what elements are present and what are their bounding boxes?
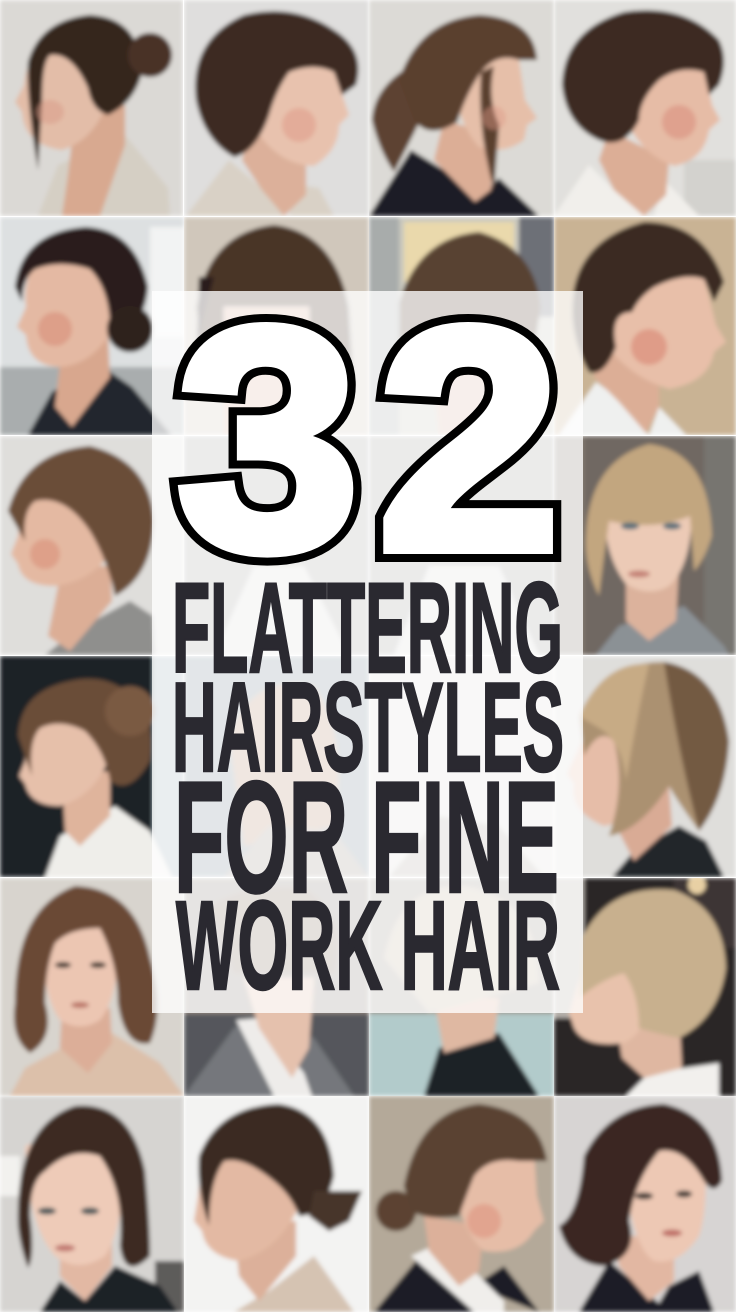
photo: behind panel, centre right — [390, 814, 544, 877]
photo: side bun in black blazer — [369, 1096, 554, 1312]
photo: messy bun in white shirt on dark background — [0, 656, 184, 877]
photo: behind panel, centre left — [184, 656, 369, 877]
photo: wavy chin-length bob in black top — [554, 1096, 736, 1312]
photo: blonde bob in black blazer — [369, 878, 554, 1096]
photo: low bun in dark blazer — [0, 217, 184, 435]
photo: side-swept bob with bangs — [184, 0, 369, 216]
photo: pale portrait behind panel — [369, 436, 554, 655]
photo: chestnut bob with bangs and white shirt — [554, 217, 736, 435]
photo: wispy updo in grey blazer — [0, 436, 158, 655]
photo: short layered crop with white shirt — [554, 0, 736, 216]
number: 32 — [176, 262, 561, 617]
photo: ash-brown layered bob in black top — [565, 656, 736, 877]
title text — [172, 557, 564, 1016]
number: 32: 2 — [377, 262, 561, 617]
photo: pale portrait behind panel — [184, 436, 369, 655]
number: 32: 3 — [176, 262, 360, 617]
photo: side bun with blazer — [0, 0, 183, 216]
photo: soft curls in blush blazer — [0, 878, 184, 1096]
photo: blonde fringe portrait in grey blazer — [554, 436, 736, 655]
photo: blonde tousled bob on dark background — [554, 878, 736, 1096]
photo: low ponytail with black blazer — [369, 0, 554, 216]
photo: centre-left brown bob, mostly behind panel — [184, 217, 369, 435]
photo: low tousled ponytail in beige blazer — [184, 1096, 368, 1312]
photo: tousled brunette portrait in black top — [0, 1096, 184, 1312]
photo: centre-right brown hair, mostly behind panel — [369, 217, 554, 435]
number: 32: 2 — [377, 262, 561, 617]
translucent title panel — [152, 291, 583, 1013]
number: 32: 3 — [176, 262, 360, 617]
photo: grey blazer and white shirt — [184, 878, 369, 1096]
